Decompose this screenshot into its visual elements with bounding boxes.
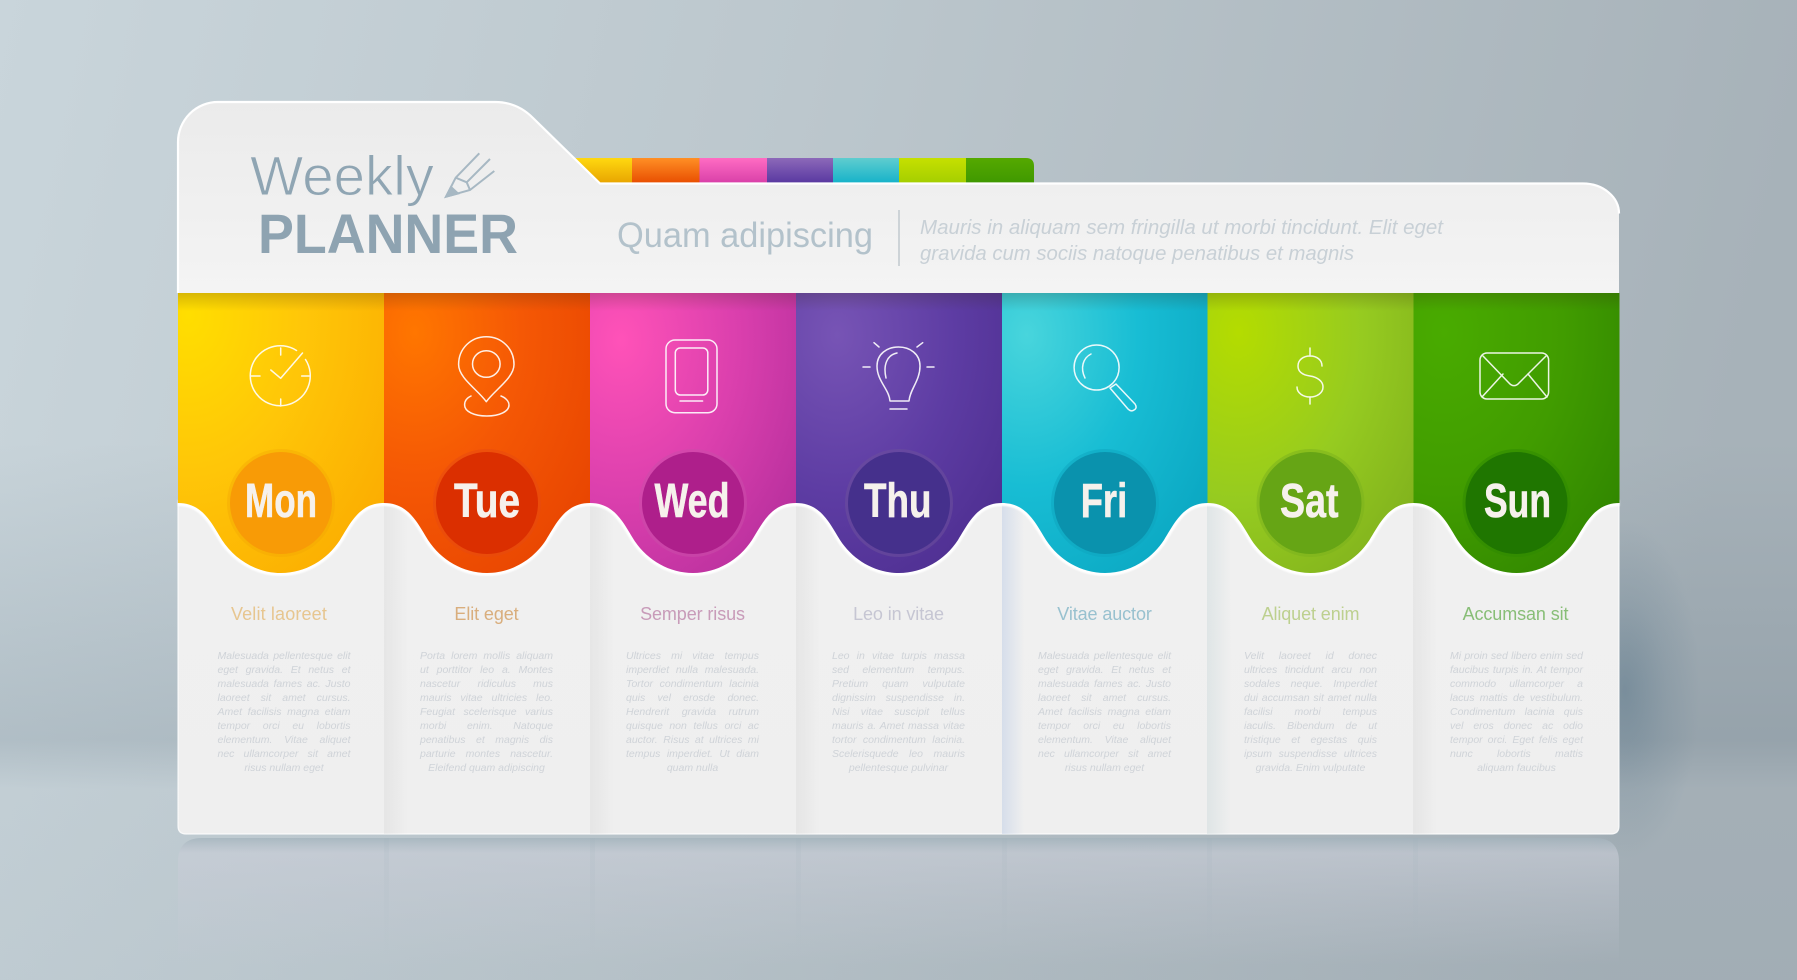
body text: Monday: tempor orci eu lobortis	[218, 720, 350, 732]
body text: Thursday: sed elementum tempus.	[832, 664, 965, 676]
folder card	[178, 102, 1619, 834]
day badge: Mon	[227, 449, 335, 557]
panel: Saturday column	[1208, 293, 1414, 573]
body text: Sunday	[1450, 650, 1584, 774]
day badge: Fri	[1051, 449, 1159, 557]
body text: Monday: eget gravida. Et netus et	[218, 664, 350, 676]
day badge: Sat: Sat	[1280, 475, 1339, 528]
panel: Wednesday column	[590, 293, 796, 573]
body text: Monday	[217, 650, 351, 774]
body text: Thursday: Pretium quam vulputate	[832, 678, 965, 690]
body text: Wednesday: quisque non tellus orci ac	[626, 720, 759, 732]
panel: Tuesday column	[384, 293, 590, 573]
body text: Saturday: facilisi morbi tempus	[1244, 706, 1377, 718]
day badge: Wed	[639, 449, 747, 557]
body text: Thursday: tortor condimentum lacinia.	[832, 734, 965, 746]
description text: Mauris in aliquam sem fringilla ut morbi tincidunt. Elit eget	[920, 217, 1444, 239]
text block: Friday	[1038, 604, 1172, 774]
body text: Tuesday: mauris vitae ultricies leo.	[420, 692, 553, 704]
day badge: Thu	[845, 449, 953, 557]
body text: Wednesday: auctor. Risus at ultrices mi	[626, 734, 759, 746]
description text	[920, 217, 1444, 265]
body text: Saturday: tristique et egestas quis	[1244, 734, 1377, 746]
body text: Friday: nec ullamcorper sit amet	[1038, 748, 1171, 760]
body text: Thursday: Leo in vitae turpis massa	[832, 650, 965, 662]
body text: Sunday: Condimentum lacinia quis	[1450, 706, 1583, 718]
day badge: Sun: Sun	[1484, 475, 1551, 528]
body text: Thursday: Scelerisquede leo mauris	[832, 748, 965, 760]
body text: Friday: laoreet sit amet cursus.	[1038, 692, 1171, 704]
body text: Saturday: ipsum suspendisse ultrices	[1244, 748, 1377, 760]
text block: Tuesday	[420, 604, 553, 774]
icon: map pin	[459, 337, 514, 416]
panel: Friday column	[1002, 293, 1208, 573]
body text: Saturday: ultrices tincidunt arcu non	[1244, 664, 1377, 676]
panel: Thursday column	[796, 293, 1002, 573]
body text: Wednesday: imperdiet nulla malesuada.	[626, 664, 759, 676]
day badge: Sun	[1462, 449, 1570, 557]
icon: envelope	[1480, 353, 1549, 399]
icon: tablet	[666, 340, 717, 413]
body text: Monday: nec ullamcorper sit amet	[218, 748, 350, 760]
icon: pencil	[446, 153, 494, 197]
body text: Friday: elementum. Vitae aliquet	[1038, 734, 1171, 746]
body text: Thursday: pellentesque pulvinar	[849, 762, 948, 774]
body text: Saturday: gravida. Enim vulputate	[1256, 762, 1365, 774]
icon: dollar sign	[1297, 348, 1323, 404]
body text: Monday: Malesuada pellentesque elit	[218, 650, 350, 662]
body text: Monday: Amet facilisis magna etiam	[218, 706, 350, 718]
body text: Thursday	[832, 650, 965, 774]
panel: Sunday column	[1414, 293, 1620, 573]
body text: Tuesday: Porta lorem mollis aliquam	[420, 650, 553, 662]
body text: Saturday	[1244, 650, 1378, 774]
body text: Sunday: nunc lobortis mattis	[1450, 748, 1583, 760]
body text: Friday: Amet facilisis magna etiam	[1038, 706, 1171, 718]
icon: light bulb	[863, 343, 934, 409]
day badge: Mon: Mon	[245, 475, 317, 528]
day badge: Tue	[433, 449, 541, 557]
heading: Vitae auctor: Vitae auctor	[1057, 604, 1152, 624]
heading: Leo in vitae: Leo in vitae	[853, 604, 944, 624]
icon: clock with check	[250, 346, 310, 406]
body text: Friday	[1038, 650, 1172, 774]
body text: Wednesday: quam nulla	[667, 762, 718, 774]
body text: Friday: Malesuada pellentesque elit	[1038, 650, 1171, 662]
day badge: Tue: Tue	[454, 475, 520, 528]
body text: Wednesday: quis vel erosde donec.	[626, 692, 759, 704]
body text: Sunday: aliquam faucibus	[1477, 762, 1556, 774]
body text: Sunday: lacus mattis de vestibulum.	[1450, 692, 1583, 704]
heading: Semper risus: Semper risus	[640, 604, 745, 624]
body text: Monday: malesuada fames ac. Justo	[218, 678, 350, 690]
icon: magnifier	[1074, 345, 1136, 411]
body text: Friday: tempor orci eu lobortis	[1038, 720, 1171, 732]
body text: Sunday: commodo ullamcorper a	[1450, 678, 1583, 690]
description text: gravida cum sociis natoque penatibus et magnis	[920, 243, 1354, 265]
body text: Wednesday: Hendrerit gravida rutrum	[626, 706, 759, 718]
body text: Wednesday: tempus imperdiet. Ut diam	[626, 748, 759, 760]
title: Weekly PLANNER	[250, 144, 518, 265]
text block: Sunday	[1450, 604, 1584, 774]
body text: Thursday: dignissim suspendisse in.	[832, 692, 965, 704]
body text: Sunday: vel eros donec ac odio	[1450, 720, 1583, 732]
body text: Sunday: Mi proin sed libero enim sed	[1450, 650, 1583, 662]
day badge: Wed: Wed	[654, 475, 730, 528]
body text: Saturday: sodales neque. Imperdiet	[1244, 678, 1377, 690]
panel: Monday column	[178, 293, 384, 573]
body text: Monday: risus nullam eget	[244, 762, 324, 774]
day badge: Thu: Thu	[864, 475, 932, 528]
body text: Sunday: faucibus turpis in. At tempor	[1450, 664, 1583, 676]
title: Weekly PLANNER: Weekly	[250, 144, 434, 207]
heading: Aliquet enim: Aliquet enim	[1262, 604, 1359, 624]
day badge: Sat	[1256, 449, 1364, 557]
body text: Wednesday: Tortor condimentum lacinia	[626, 678, 759, 690]
body text: Saturday: dui accumsan sit amet nulla	[1244, 692, 1377, 704]
body text: Friday: eget gravida. Et netus et	[1038, 664, 1171, 676]
text block: Thursday	[832, 604, 965, 774]
heading: Elit eget: Elit eget	[454, 604, 519, 624]
body text: Tuesday: morbi enim. Natoque	[420, 720, 553, 732]
body text: Tuesday: parturie montes nascetur.	[420, 748, 553, 760]
colour tab strip behind the folder	[540, 158, 1034, 184]
body text: Tuesday: ut porttitor leo a. Montes	[420, 664, 553, 676]
body text: Tuesday: Feugiat scelerisque varius	[420, 706, 553, 718]
body text: Friday: malesuada fames ac. Justo	[1038, 678, 1171, 690]
body text: Tuesday: Eleifend quam adipiscing	[428, 762, 545, 774]
body text: Monday: laoreet sit amet cursus.	[218, 692, 350, 704]
text block: Wednesday	[626, 604, 760, 774]
body text: Thursday: Nisi vitae suscipit tellus	[832, 706, 965, 718]
body text: Friday: risus nullam eget	[1065, 762, 1144, 774]
body text: Wednesday	[626, 650, 760, 774]
body text: Tuesday: penatibus et magnis dis	[420, 734, 553, 746]
body text: Tuesday	[420, 650, 553, 774]
body text: Saturday: iaculis. Bibendum de ut	[1244, 720, 1377, 732]
heading: Velit laoreet: Velit laoreet	[231, 604, 327, 624]
day badge: Fri: Fri	[1081, 475, 1127, 528]
text block: Monday	[217, 604, 351, 774]
body text: Sunday: tempor orci. Eget felis eget	[1450, 734, 1583, 746]
card reflection on the floor	[178, 838, 1619, 965]
body text: Tuesday: nascetur ridiculus mus	[420, 678, 553, 690]
white wave edge under colour columns	[178, 503, 1620, 573]
text block: Saturday	[1244, 604, 1378, 774]
heading: Accumsan sit: Accumsan sit	[1463, 604, 1568, 624]
body text: Saturday: Velit laoreet id donec	[1244, 650, 1377, 662]
body text: Thursday: mauris a. Amet massa vitae	[832, 720, 965, 732]
body text: Wednesday: Ultrices mi vitae tempus	[626, 650, 759, 662]
divider line	[898, 210, 900, 266]
body text: Monday: elementum. Vitae aliquet	[218, 734, 350, 746]
title: Weekly PLANNER: PLANNER	[258, 202, 518, 265]
subheading: Quam adipiscing: Quam adipiscing	[617, 216, 873, 255]
